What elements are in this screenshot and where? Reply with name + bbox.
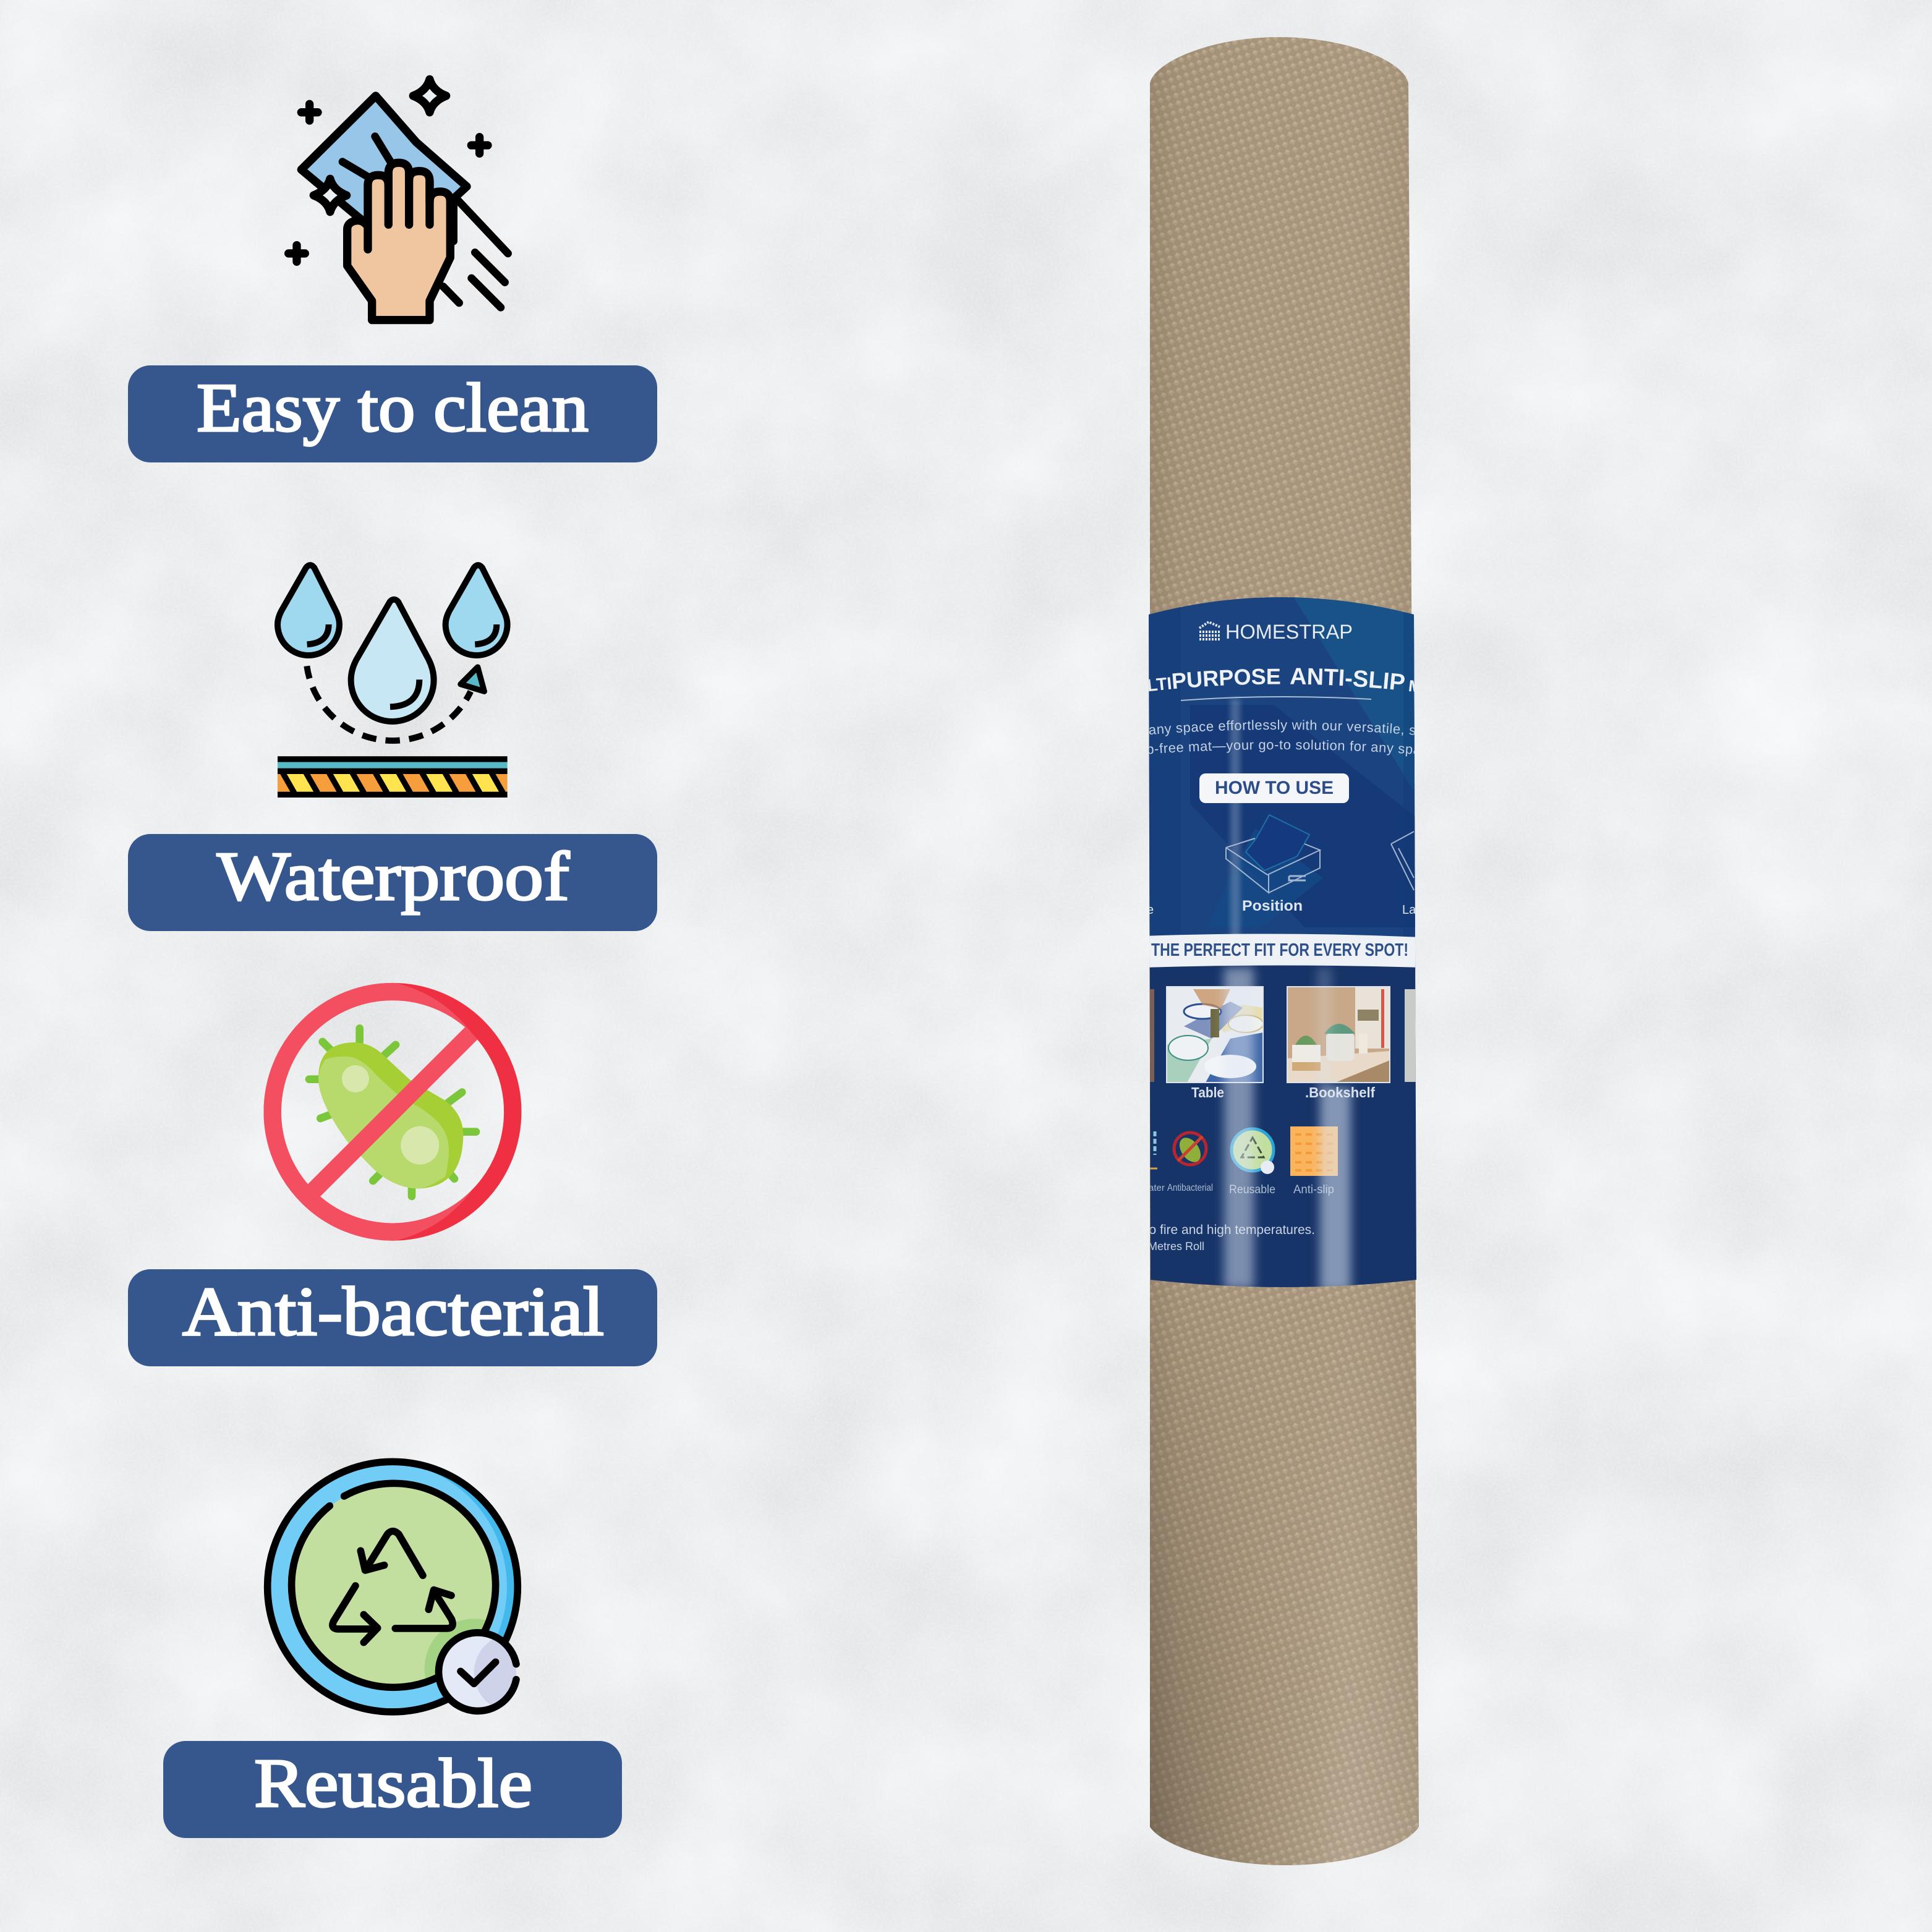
white heading band: THE PERFECT FIT FOR EVERY SPOT! — [1151, 940, 1408, 960]
label description — [1102, 717, 1450, 759]
gloss highlights — [1224, 968, 1351, 1292]
packaging label — [1052, 575, 1450, 1298]
label: Easy to clean: Easy to clean — [197, 370, 589, 446]
title on label: MULTIPURPOSE ANTI-SLIPMAT — [1149, 668, 1415, 692]
photo stubs — [1147, 989, 1154, 1082]
step captions: Lay — [1402, 903, 1422, 917]
mat roll body — [1144, 31, 1428, 1873]
label: Easy to clean — [128, 365, 657, 462]
photo captions: .Bookshelf — [1305, 1084, 1375, 1100]
label: Waterproof — [128, 834, 657, 931]
icon: reusable recycle badge — [263, 1458, 522, 1716]
care note: 2 Metres x 5 Metres Roll — [1084, 1240, 1204, 1253]
care note: Avoid exposure to fire and high temperatures. — [1052, 1223, 1315, 1237]
step captions: Position — [1242, 898, 1303, 914]
mini feature captions: ater — [1149, 1183, 1165, 1193]
label description: Define any space effortlessly with our versatile, stylish — [1149, 720, 1415, 736]
mini feature captions: Antibacterial — [1167, 1183, 1213, 1193]
how to use button: HOW TO USE — [1215, 778, 1334, 798]
drawer illustration — [1226, 815, 1414, 893]
mini feature captions — [1149, 1183, 1334, 1196]
step captions — [1110, 898, 1422, 917]
photo captions — [1191, 1084, 1375, 1100]
photo: bookshelf — [1287, 987, 1390, 1083]
icon: anti-bacterial prohibition sign — [273, 992, 513, 1232]
mini feature captions: Anti-slip — [1293, 1183, 1334, 1196]
mini feature icons — [1149, 1126, 1338, 1176]
label: Reusable: Reusable — [254, 1745, 532, 1822]
icon: hand wiping with cloth — [289, 79, 508, 320]
mini feature captions: Reusable — [1229, 1183, 1275, 1196]
white heading band — [1144, 934, 1422, 968]
label: Anti-bacterial — [128, 1269, 657, 1366]
step captions: Prepare — [1110, 903, 1154, 917]
how to use button — [1199, 773, 1349, 803]
photo captions: Table — [1191, 1084, 1224, 1100]
care note — [1052, 1223, 1315, 1253]
label: Waterproof: Waterproof — [217, 838, 570, 915]
photo: table — [1167, 987, 1263, 1083]
label: Anti-bacterial: Anti-bacterial — [182, 1274, 604, 1350]
label description: a slip-free mat—your go-to solution for any space. — [1120, 737, 1441, 759]
icon: waterproof drops — [278, 565, 508, 798]
label: Reusable — [163, 1741, 622, 1838]
brand logo: HOMESTRAP — [1225, 621, 1353, 643]
product photo: rolled mat — [1052, 31, 1450, 1873]
